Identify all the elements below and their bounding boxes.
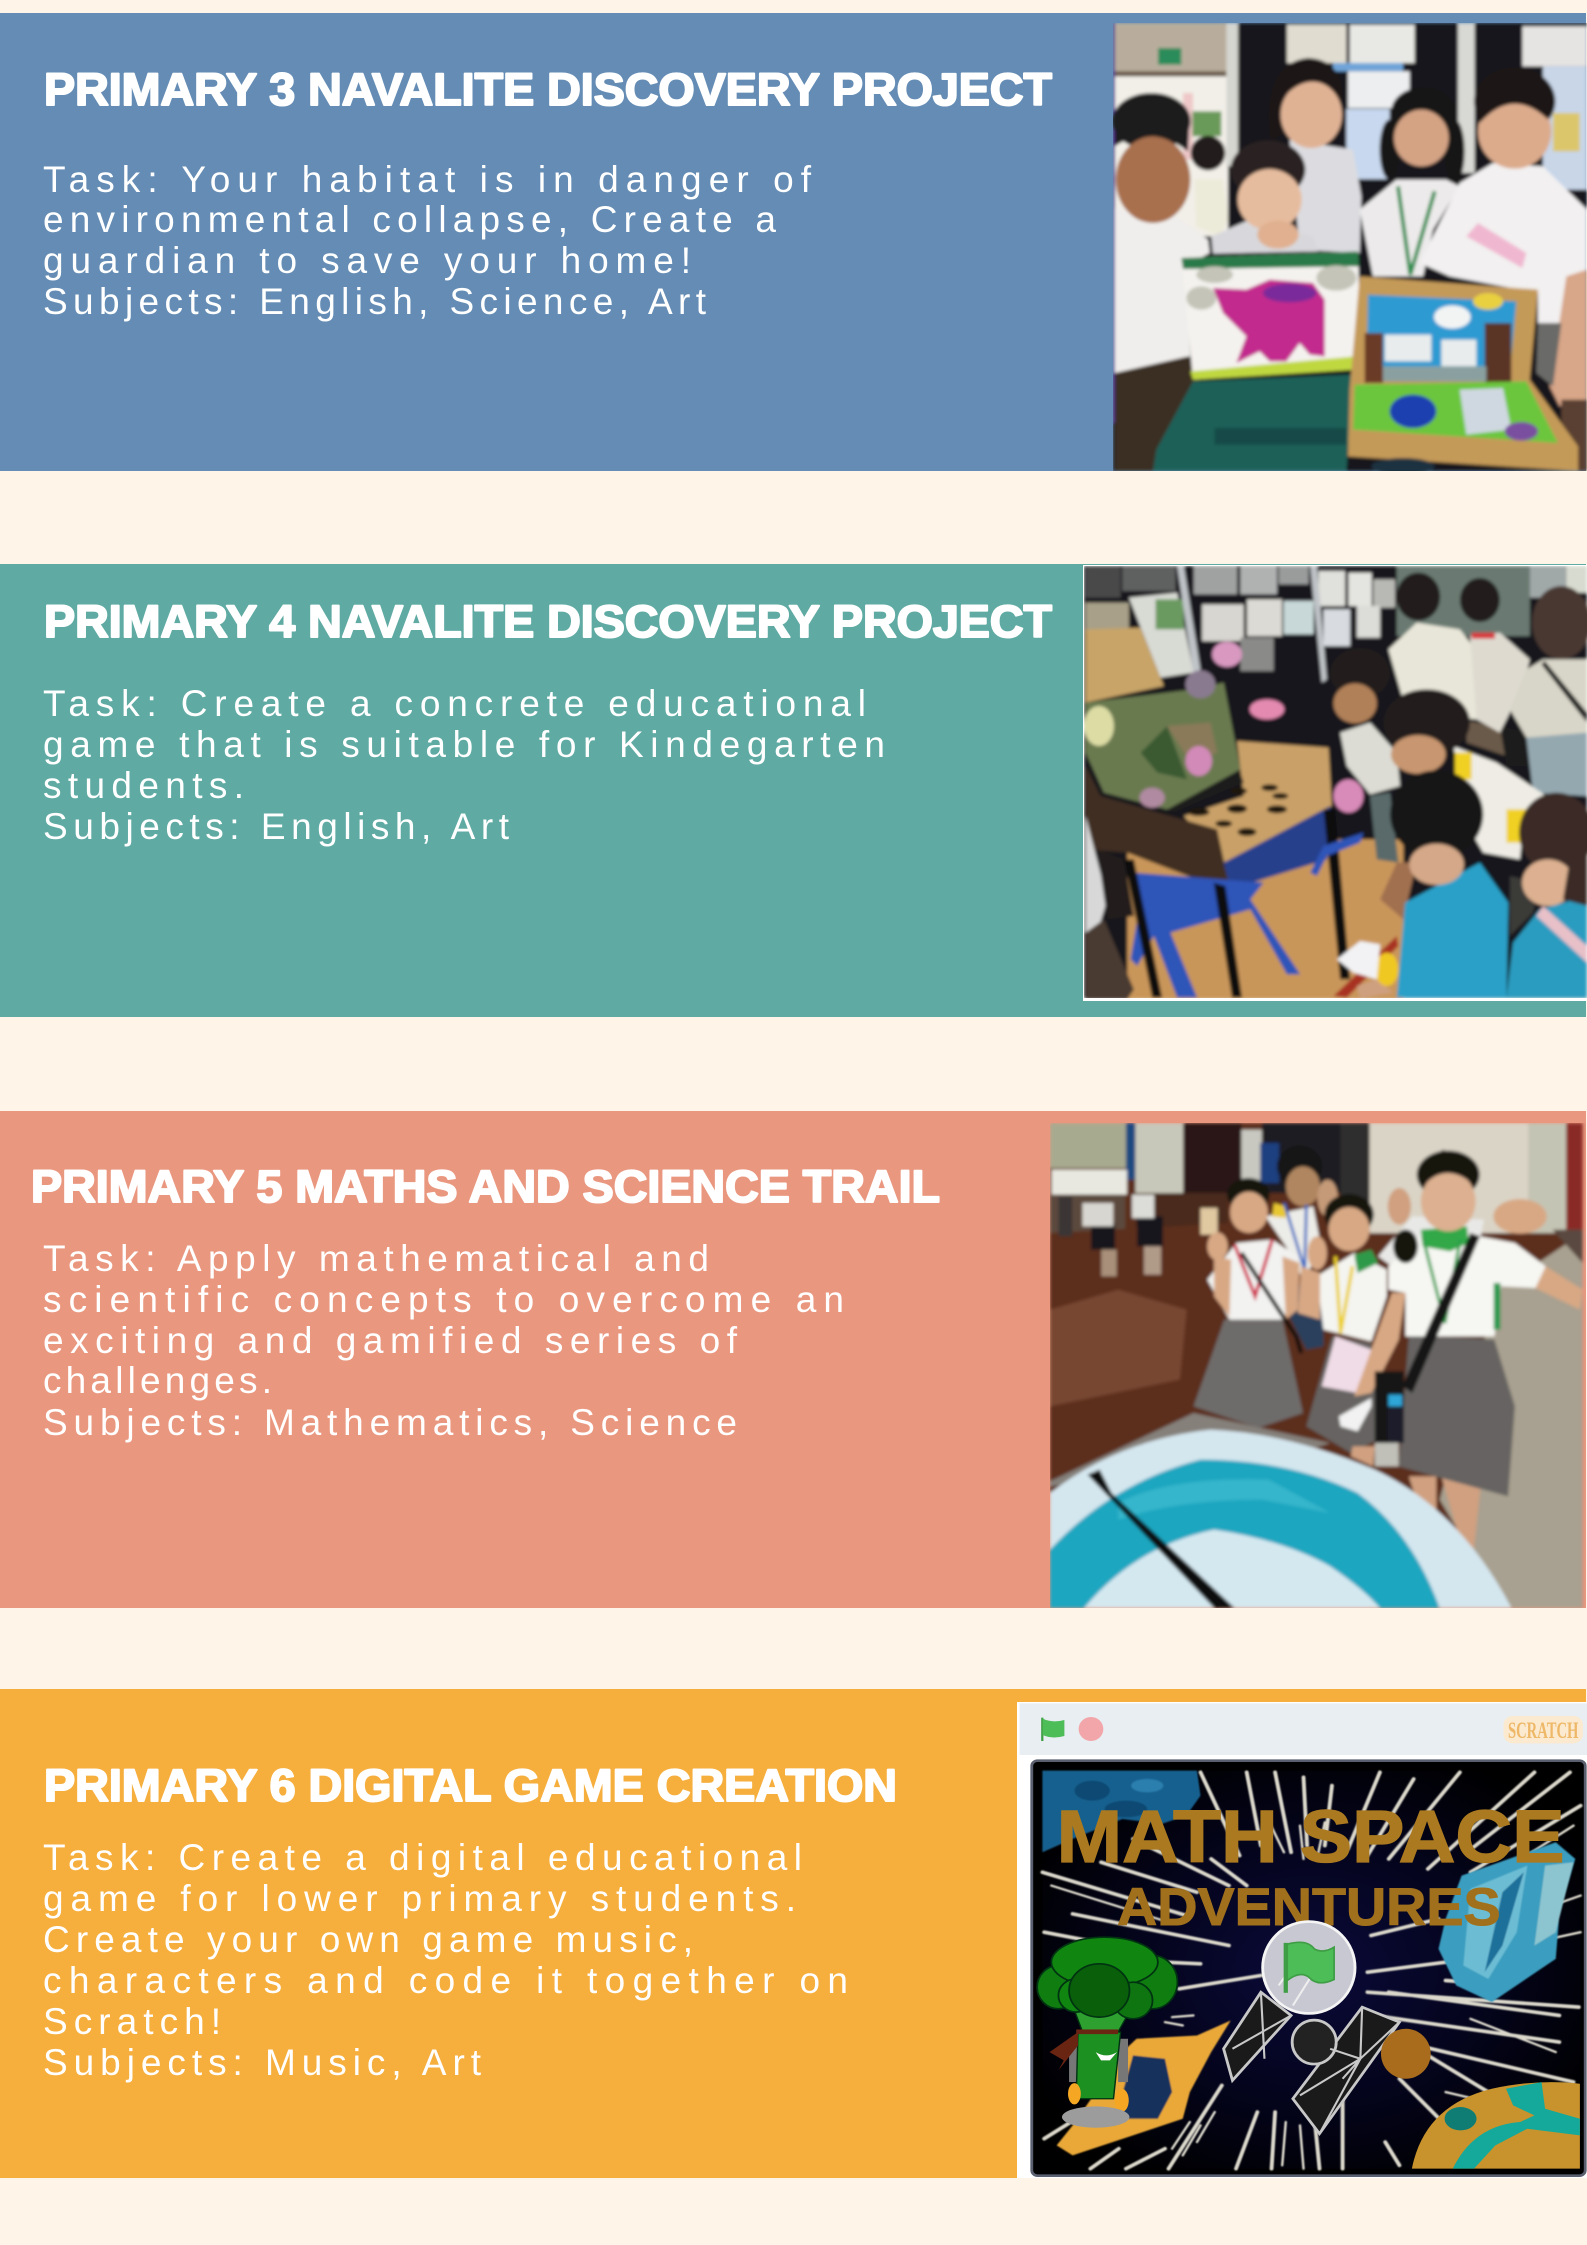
light rays (1042, 1772, 1581, 2169)
habitat diorama (1348, 276, 1578, 475)
student: left girl (1194, 1178, 1303, 1428)
student: back girl (1265, 1146, 1338, 1350)
photo: students playing concrete educational game (1083, 565, 1587, 1001)
panel: Primary 5 Maths and Science Trail (0, 1111, 1586, 1608)
student: background child (1191, 136, 1228, 236)
panel: Primary 4 Navalite Discovery Project (0, 564, 1587, 1017)
guardian poster box (1181, 251, 1361, 380)
icon: stop button (1079, 1717, 1103, 1741)
text block: Primary 5 task and subjects: Task: Apply mathematical and (43, 1238, 709, 1279)
student: boy in grey (1330, 648, 1417, 919)
text block: Primary 6 task and subjects: Scratch! (43, 2001, 221, 2042)
text block: Primary 6 task and subjects: characters and code it together on (43, 1960, 848, 2001)
text block: Primary 4 task and subjects: students. (43, 765, 244, 806)
panel: Primary 6 Digital Game Creation (0, 1689, 1587, 2178)
photo: students at maths and science trail (1050, 1123, 1586, 1608)
photo: students with habitat guardian project (1113, 23, 1587, 471)
Scratch toolbar (1020, 1704, 1587, 1755)
planet: gold and teal (1412, 2082, 1580, 2169)
heading: Primary 3: PRIMARY 3 NAVALITE DISCOVERY PROJECT (44, 64, 1052, 115)
floor and table (1153, 375, 1353, 471)
bag, bottle and shoe (1339, 1371, 1404, 1466)
heading: Primary 4: PRIMARY 4 NAVALITE DISCOVERY PROJECT (44, 596, 1052, 647)
text block: Primary 5 task and subjects (43, 1238, 844, 1443)
text block: Primary 3 task and subjects (43, 159, 812, 322)
game title: MATH SPACE (1057, 1796, 1565, 1879)
text block: Primary 6 task and subjects (43, 1837, 848, 2083)
portal swirl (1057, 2020, 1231, 2155)
asteroid: blue top left (1042, 1771, 1201, 1852)
student: right boy (1420, 67, 1587, 406)
inflatable pool (1050, 1430, 1511, 1608)
ship (1224, 1992, 1399, 2134)
text block: Primary 6 task and subjects: Subjects: Music, Art (43, 2042, 482, 2083)
planet: brown orb (1381, 2029, 1431, 2079)
screenshot: Scratch game Math Space Adventures (1017, 1702, 1587, 2178)
text block: Primary 5 task and subjects: challenges. (43, 1360, 272, 1401)
text block: Primary 3 task and subjects: Subjects: English, Science, Art (43, 281, 707, 322)
student: girl in blue (1506, 793, 1587, 998)
student: back row (1388, 573, 1587, 796)
text block: Primary 4 task and subjects: Task: Create a concrete educational (43, 683, 866, 724)
text block: Primary 3 task and subjects: Task: Your habitat is in danger of (43, 159, 812, 200)
heading: Primary 6: PRIMARY 6 DIGITAL GAME CREATION (44, 1760, 897, 1811)
flower arrangement (1084, 642, 1284, 809)
panel: Primary 3 Navalite Discovery Project (0, 13, 1587, 475)
game title (1057, 1796, 1565, 1936)
text block: Primary 4 task and subjects: Subjects: English, Art (43, 806, 510, 847)
text block: Primary 4 task and subjects (43, 683, 885, 847)
student: boy in blue (1390, 770, 1508, 998)
game title: ADVENTURES (1117, 1877, 1501, 1936)
student: boy in white and yellow (1383, 689, 1546, 859)
game board (1086, 741, 1332, 891)
student: girl with lanyard (1360, 87, 1465, 276)
student: left boy (1112, 93, 1210, 471)
background students (1059, 1195, 1163, 1276)
text block: Primary 5 task and subjects: exciting and gamified series of (43, 1320, 738, 1361)
text block: Primary 3 task and subjects: environmental collapse, Create a (43, 199, 776, 240)
text block: Primary 5 task and subjects: scientific concepts to overcome an (43, 1279, 844, 1320)
text block: Primary 6 task and subjects: Task: Create a digital educational (43, 1837, 802, 1878)
text block: Primary 4 task and subjects: game that is suitable for Kindegarten (43, 724, 885, 765)
text block: Primary 3 task and subjects: guardian to save your home! (43, 240, 691, 281)
text block: Primary 5 task and subjects: Subjects: Mathematics, Science (43, 1402, 737, 1443)
student: right girl with waving hand (1354, 1150, 1583, 1550)
text block: Primary 6 task and subjects: game for lower primary students. (43, 1878, 796, 1919)
icon: green flag (1041, 1718, 1064, 1741)
blue chair and table legs (1124, 809, 1363, 998)
student: middle girl (1298, 1194, 1387, 1453)
icon: large green flag button (1263, 1922, 1355, 2013)
paper origami in hand (1337, 941, 1398, 998)
game stage (1030, 1759, 1587, 2177)
text block: Primary 6 task and subjects: Create your own game music, (43, 1919, 693, 1960)
student: front girl (1211, 140, 1318, 254)
floor (1127, 839, 1403, 999)
heading: Primary 5: PRIMARY 5 MATHS AND SCIENCE TRAIL (31, 1161, 940, 1212)
character: broccoli (1037, 1937, 1177, 2128)
asteroid: ice right (1439, 1842, 1575, 2002)
student: top centre (1269, 58, 1361, 253)
